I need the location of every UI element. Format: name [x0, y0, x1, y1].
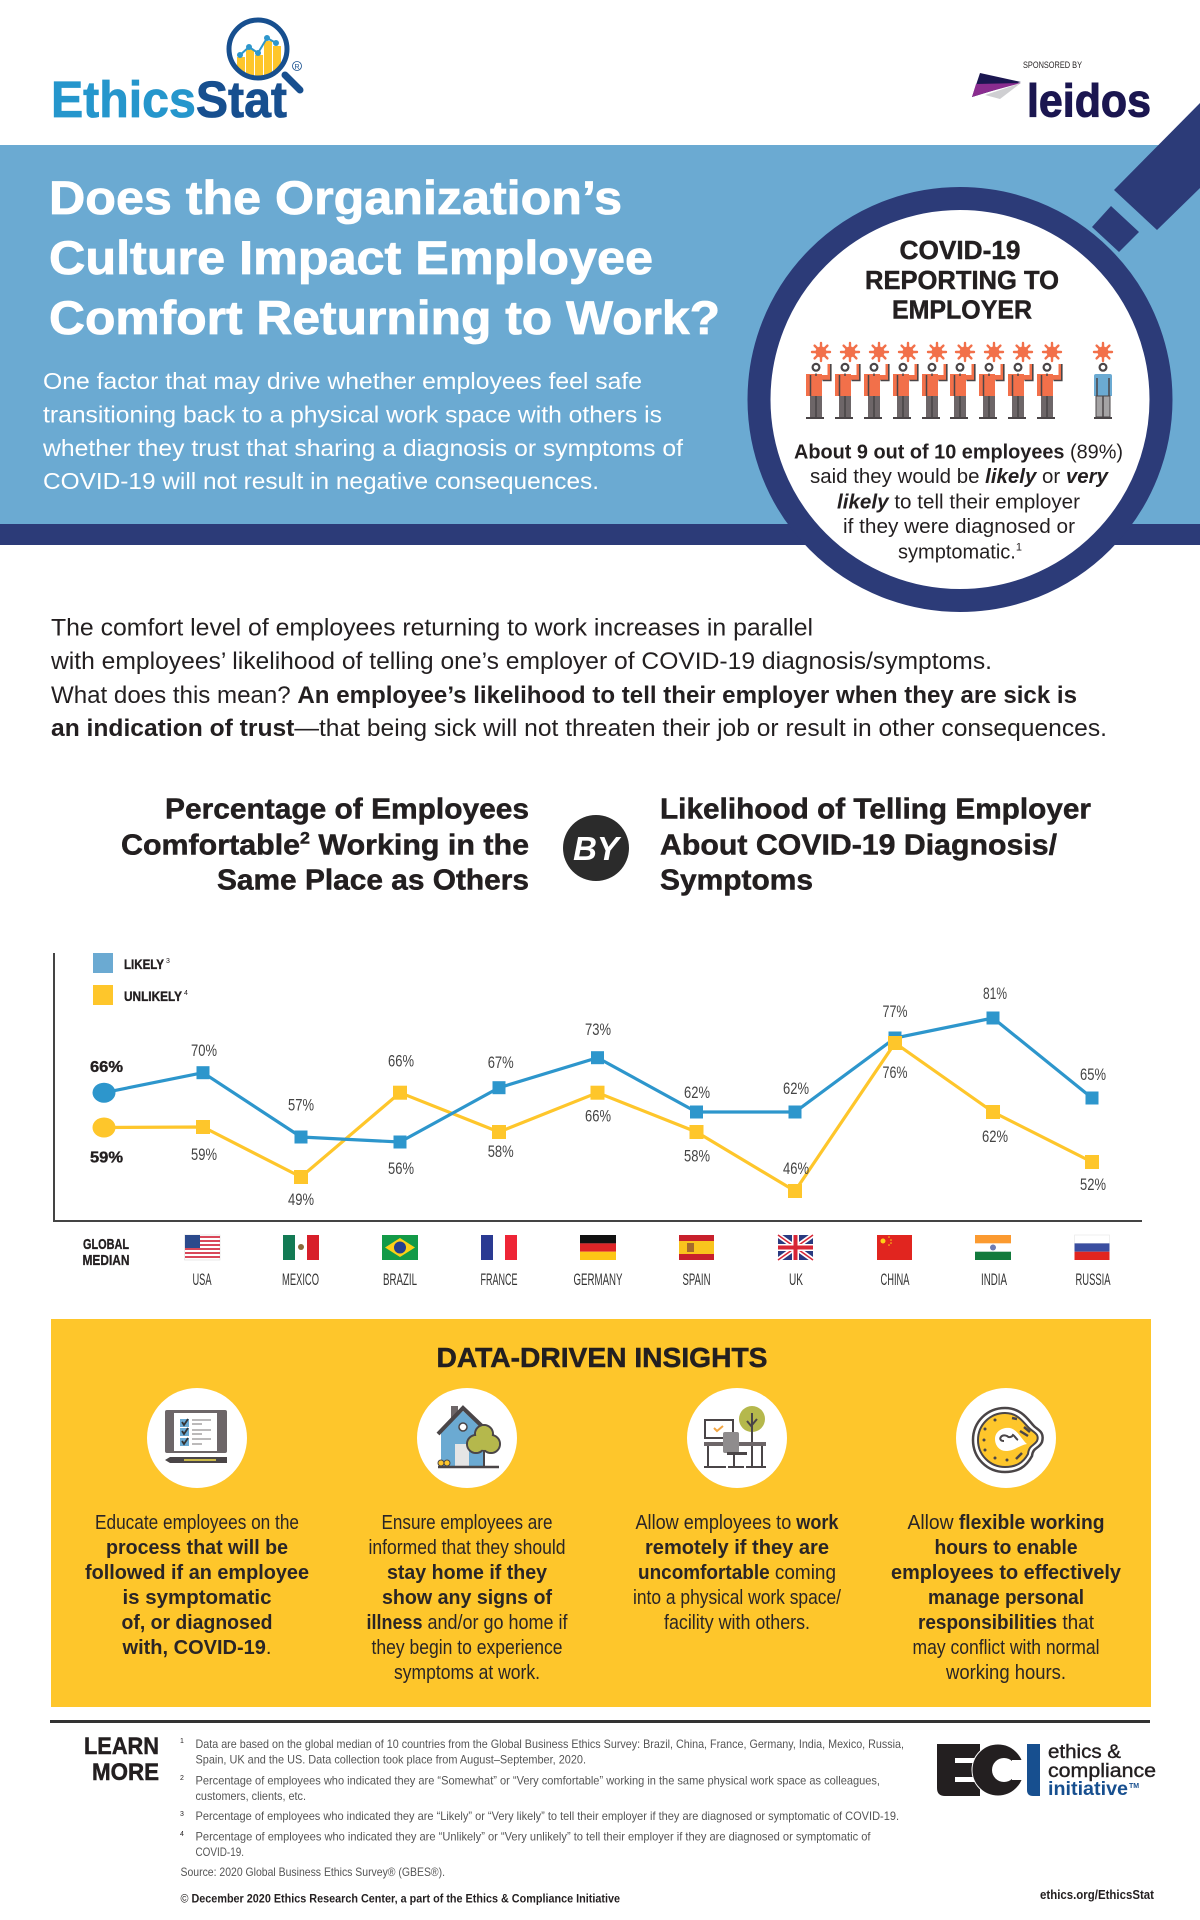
- insight 3 text: into a physical work space/: [633, 1587, 841, 1609]
- title: Comfort Returning to Work?: [49, 291, 720, 344]
- heading: percentage comfortable: Working in the: [310, 830, 529, 862]
- heading: percentage comfortable: Same Place as Others: [217, 864, 529, 896]
- legend: [93, 953, 188, 1005]
- value labels: 66%: [388, 1053, 414, 1071]
- series: unlikely: [92, 1043, 1099, 1198]
- insight 4 text: responsibilities that: [918, 1612, 1094, 1634]
- x axis: global median label: [82, 1236, 130, 1269]
- callout heading: [865, 235, 1059, 324]
- country labels: SPAIN: [682, 1271, 710, 1289]
- footnotes: Percentage of employees who indicated they are “Likely” or “Very likely” to tell their employer if they are diagnosed or symptomatic of COVID-19.: [196, 1809, 899, 1823]
- footnotes: Percentage of employees who indicated they are “Unlikely” or “Very unlikely” to tell their employer if they are diagnosed or symptomatic of: [196, 1830, 871, 1844]
- flag: Brazil: [382, 1235, 418, 1260]
- country labels: [192, 1271, 1110, 1289]
- country labels: CHINA: [880, 1271, 910, 1289]
- insight 4 text: Allow flexible working: [908, 1512, 1104, 1534]
- heading: percentage comfortable: Percentage of Employees: [165, 794, 529, 826]
- value labels: 46%: [783, 1160, 809, 1178]
- country labels: INDIA: [981, 1271, 1007, 1289]
- value labels: [191, 985, 1106, 1209]
- logo: ECI: ethics &: [1048, 1742, 1121, 1763]
- callout heading: REPORTING TO: [865, 265, 1059, 295]
- value labels: 66%: [585, 1108, 611, 1126]
- chart axes: [54, 953, 1142, 1221]
- body paragraph: [50, 614, 1107, 742]
- insight 1 text: [85, 1512, 309, 1659]
- callout text: if they were diagnosed or: [843, 516, 1075, 538]
- flag: China: [877, 1235, 912, 1260]
- title: Does the Organization’s: [49, 171, 622, 224]
- logo: EthicsStat: EthicsStat: [51, 71, 287, 128]
- panel heading: DATA-DRIVEN INSIGHTS: [436, 1342, 768, 1373]
- insight 1 text: followed if an employee: [85, 1562, 309, 1584]
- legend: LIKELY: [124, 956, 165, 972]
- callout text: 1: [1016, 542, 1022, 554]
- footnotes: [180, 1737, 904, 1906]
- intro text block: transitioning back to a physical work space with others is: [43, 402, 662, 428]
- global median values: [90, 1059, 123, 1167]
- value labels: 76%: [882, 1064, 908, 1082]
- website link: ethics.org/EthicsStat: [1040, 1887, 1155, 1902]
- intro text block: [42, 368, 684, 494]
- value labels: 62%: [783, 1080, 809, 1098]
- heading: percentage comfortable: 2: [300, 828, 310, 848]
- insight 4 text: employees to effectively: [891, 1562, 1122, 1584]
- legend: UNLIKELY: [124, 988, 183, 1004]
- heading: percentage comfortable: Comfortable: [121, 830, 292, 862]
- footnotes: Spain, UK and the US. Data collection took place from August–September, 2020.: [196, 1752, 586, 1766]
- value labels: 59%: [191, 1146, 217, 1164]
- flag: USA: [184, 1235, 220, 1260]
- value labels: 58%: [488, 1143, 514, 1161]
- line chart: [54, 953, 1142, 1221]
- insight 1 text: of, or diagnosed: [122, 1612, 272, 1634]
- footnotes: 2: [180, 1775, 184, 1782]
- logo: ECI: [937, 1742, 1156, 1800]
- badge: BY: BY: [573, 830, 622, 867]
- insight 3 text: uncomfortable coming: [638, 1562, 836, 1584]
- callout text: symptomatic.: [898, 542, 1016, 564]
- value labels: 70%: [191, 1042, 217, 1060]
- value labels: 77%: [882, 1003, 908, 1021]
- logo: EthicsStat: R: [294, 64, 300, 71]
- footnotes: COVID-19.: [196, 1845, 244, 1859]
- footnotes: 4: [180, 1831, 184, 1838]
- body paragraph: What does this mean? An employee’s likelihood to tell their employer when they are sick is: [51, 682, 1077, 709]
- country labels: FRANCE: [480, 1271, 518, 1289]
- value labels: 62%: [684, 1084, 710, 1102]
- logo: leidos sponsor: SPONSORED BY: [1023, 60, 1082, 70]
- flag: Mexico: [283, 1235, 319, 1260]
- logo: leidos sponsor: [972, 60, 1151, 126]
- insight 2 text: show any signs of: [382, 1587, 552, 1609]
- insight 2 text: informed that they should: [368, 1537, 566, 1559]
- insight 3 text: facility with others.: [664, 1612, 810, 1634]
- insight 1 text: process that will be: [106, 1537, 288, 1559]
- country labels: MEXICO: [282, 1271, 319, 1289]
- panel: data-driven insights: [51, 1319, 1151, 1707]
- legend: 4: [184, 990, 188, 997]
- value labels: 57%: [288, 1097, 314, 1115]
- insight 4 text: manage personal: [928, 1587, 1084, 1609]
- intro text block: COVID-19 will not result in negative consequences.: [43, 468, 599, 494]
- value labels: 65%: [1080, 1066, 1106, 1084]
- insight 2 text: stay home if they: [387, 1562, 548, 1584]
- insight 1 text: Educate employees on the: [95, 1512, 299, 1534]
- heading: likelihood of telling employer: About COVID-19 Diagnosis/: [660, 830, 1057, 862]
- logo: ECI: compliance: [1048, 1761, 1156, 1782]
- footer rule: [50, 1720, 1150, 1723]
- title: [49, 171, 720, 344]
- country labels: UK: [789, 1271, 803, 1289]
- flag: France: [481, 1235, 517, 1260]
- insight 2 text: Ensure employees are: [382, 1512, 552, 1534]
- footnotes: 3: [180, 1811, 184, 1818]
- callout text: likely to tell their employer: [837, 492, 1080, 514]
- intro text block: whether they trust that sharing a diagnosis or symptoms of: [42, 435, 684, 461]
- global median values: 66%: [90, 1059, 123, 1076]
- title: Culture Impact Employee: [49, 231, 653, 284]
- country labels: GERMANY: [574, 1271, 622, 1289]
- flag: India: [975, 1235, 1011, 1260]
- footnotes: Source: 2020 Global Business Ethics Survey® (GBES®).: [180, 1865, 445, 1879]
- footnotes: customers, clients, etc.: [196, 1789, 306, 1803]
- insight 4 text: [891, 1512, 1122, 1684]
- flag row with country names: [184, 1235, 1110, 1289]
- body paragraph: The comfort level of employees returning to work increases in parallel: [51, 614, 813, 642]
- logo: ECI: TM: [1129, 1783, 1139, 1790]
- footnotes: Percentage of employees who indicated they are “Somewhat” or “Very comfortable” working in the same physical work space as colleagues,: [196, 1774, 880, 1788]
- country labels: BRAZIL: [383, 1271, 417, 1289]
- badge: BY: [563, 815, 629, 881]
- insight 2 text: symptoms at work.: [394, 1662, 540, 1684]
- series: likely: [92, 1012, 1098, 1148]
- callout text: About 9 out of 10 employees (89%): [794, 442, 1123, 464]
- value labels: 81%: [983, 985, 1007, 1003]
- logo: leidos sponsor: leidos: [1027, 74, 1151, 126]
- icon: house and tree: [417, 1388, 517, 1488]
- icon: tablet checklist: [147, 1388, 247, 1488]
- learn more heading: [84, 1733, 159, 1786]
- heading: percentage comfortable: [121, 794, 529, 896]
- insight 3 text: Allow employees to work: [636, 1512, 839, 1534]
- insight 2 text: they begin to experience: [372, 1637, 562, 1659]
- intro text block: One factor that may drive whether employees feel safe: [43, 368, 642, 394]
- logo: EthicsStat: [51, 20, 302, 128]
- value labels: 49%: [288, 1191, 314, 1209]
- country labels: RUSSIA: [1076, 1271, 1110, 1289]
- value labels: 56%: [388, 1160, 414, 1178]
- icon: remote work desk: [687, 1388, 787, 1488]
- insight 1 text: is symptomatic: [122, 1587, 272, 1609]
- heading: likelihood of telling employer: Symptoms: [660, 864, 813, 896]
- x axis: global median label: MEDIAN: [82, 1252, 130, 1269]
- insight 1: [85, 1388, 309, 1659]
- icon: magnifying glass handle: [1092, 103, 1200, 252]
- footnotes: Data are based on the global median of 10 countries from the Global Business Ethics Survey: Brazil, China, France, Germany, India, Mexico, Russia,: [196, 1737, 904, 1751]
- flag: Spain: [679, 1235, 714, 1260]
- heading: likelihood of telling employer: Likelihood of Telling Employer: [660, 794, 1091, 826]
- insight 3 text: remotely if they are: [645, 1537, 829, 1559]
- insight 4 text: hours to enable: [934, 1537, 1078, 1559]
- logo: ECI: initiative: [1048, 1779, 1128, 1800]
- heading: likelihood of telling employer: [660, 794, 1091, 896]
- footnotes: © December 2020 Ethics Research Center, a part of the Ethics & Compliance Initiative: [180, 1892, 620, 1906]
- x axis: global median label: GLOBAL: [83, 1236, 129, 1253]
- country labels: USA: [192, 1271, 212, 1289]
- insight 3 text: [633, 1512, 841, 1634]
- insight 2 text: illness and/or go home if: [366, 1612, 568, 1634]
- global median values: 59%: [90, 1150, 123, 1167]
- flag: UK: [778, 1235, 813, 1260]
- banner: blue header band: [0, 145, 1200, 545]
- value labels: 62%: [982, 1128, 1008, 1146]
- insight 4 text: may conflict with normal: [912, 1637, 1100, 1659]
- insight 2 text: [366, 1512, 568, 1684]
- value labels: 58%: [684, 1148, 710, 1166]
- insight 2: [366, 1388, 568, 1684]
- insight 4 text: working hours.: [945, 1662, 1066, 1684]
- callout heading: COVID-19: [900, 235, 1020, 265]
- value labels: 52%: [1080, 1176, 1106, 1194]
- footnotes: 1: [180, 1738, 184, 1745]
- callout text: said they would be likely or very: [810, 466, 1109, 488]
- insight 3: [633, 1388, 841, 1634]
- learn more heading: LEARN: [84, 1733, 159, 1760]
- insight 4: [891, 1388, 1122, 1684]
- value labels: 73%: [585, 1021, 611, 1039]
- flag: Germany: [580, 1235, 616, 1260]
- callout: COVID-19 reporting lens: [759, 198, 1161, 600]
- callout heading: EMPLOYER: [892, 294, 1032, 324]
- callout text: [794, 442, 1123, 564]
- icon: melting clock: [956, 1388, 1056, 1488]
- learn more heading: MORE: [92, 1759, 159, 1786]
- body paragraph: with employees’ likelihood of telling one’s employer of COVID-19 diagnosis/symptoms.: [50, 648, 992, 675]
- flag: Russia: [1074, 1235, 1110, 1260]
- value labels: 67%: [488, 1054, 514, 1072]
- legend: 3: [166, 958, 170, 965]
- body paragraph: an indication of trust —that being sick will not threaten their job or result in other consequences.: [51, 715, 1107, 742]
- insight 1 text: with, COVID-19.: [121, 1637, 271, 1659]
- pictogram: 9 of 10 people: [806, 343, 1112, 418]
